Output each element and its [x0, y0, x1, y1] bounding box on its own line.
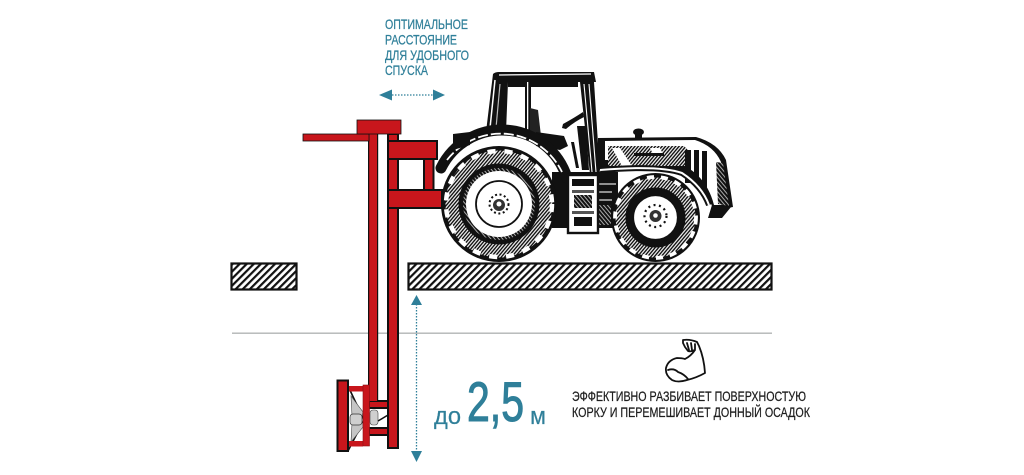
horizontal distance arrow	[379, 90, 445, 100]
feature caption: КОРКУ И ПЕРЕМЕШИВАЕТ ДОННЫЙ ОСАДОК	[572, 403, 811, 420]
cab frame	[486, 72, 600, 174]
depth label: до	[434, 403, 461, 430]
ground slab right	[408, 264, 772, 290]
vertical depth arrow	[411, 295, 422, 462]
optimal distance label: РАССТОЯНИЕ	[385, 32, 457, 48]
exhaust cap	[633, 128, 644, 143]
depth label: м	[530, 403, 546, 430]
rear wheel	[441, 146, 557, 262]
tractor	[441, 72, 733, 262]
fender highlight	[447, 134, 562, 172]
optimal distance label: ДЛЯ УДОБНОГО	[385, 47, 469, 63]
rear fender	[441, 130, 567, 178]
feature caption: ЭФФЕКТИВНО РАЗБИВАЕТ ПОВЕРХНОСТУЮ	[572, 388, 806, 404]
chassis between wheels	[552, 172, 618, 228]
optimal distance label: ОПТИМАЛЬНОЕ	[385, 16, 468, 32]
optimal distance label	[385, 16, 469, 78]
front wheel	[611, 173, 700, 262]
icon: flexed arm	[666, 340, 705, 382]
liquid level line	[232, 332, 772, 334]
mixer propeller	[348, 386, 388, 451]
depth label: 2,5	[467, 370, 524, 433]
ground slab left	[232, 264, 296, 290]
feature caption	[572, 388, 811, 420]
fender top platform	[453, 132, 470, 150]
access steps	[568, 175, 598, 233]
depth label	[434, 370, 546, 433]
optimal distance label: СПУСКА	[385, 62, 429, 78]
red mixer assembly	[303, 120, 442, 451]
engine hood	[598, 137, 733, 218]
